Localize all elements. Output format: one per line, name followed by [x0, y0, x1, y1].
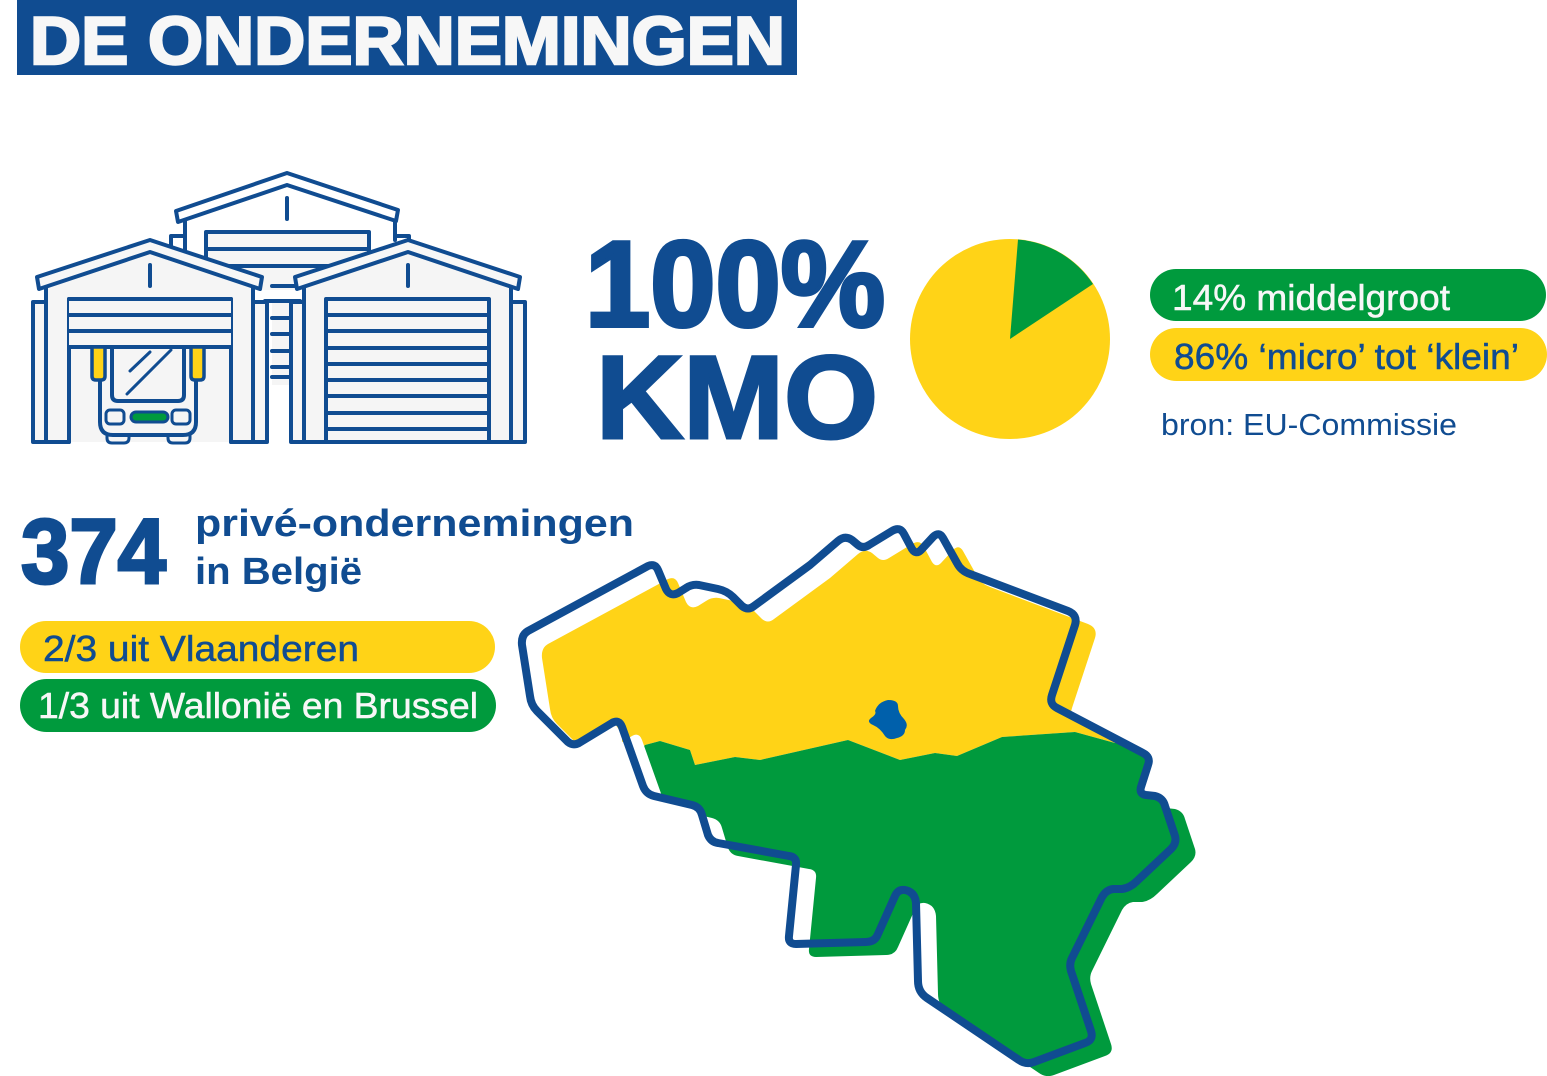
statistic: 374 private companies: in België [195, 551, 362, 593]
icon: garages with bus [33, 173, 525, 443]
statistic: 374 private companies: privé-ondernemingen [195, 503, 634, 545]
legend: KMO size: 14% middelgroot [1172, 277, 1450, 318]
region: Wallonia [644, 732, 1196, 1076]
big number: 100% KMO: KMO [596, 332, 878, 464]
white gaps where the fill stops at the outline [558, 724, 1185, 850]
right garage [291, 240, 525, 442]
legend: regions: 1/3 uit Wallonië en Brussel [38, 685, 478, 726]
region: Flanders [542, 542, 1116, 765]
big number: 100% KMO: 100% [585, 216, 885, 352]
legend: regions: 2/3 uit Vlaanderen [43, 628, 359, 669]
outline [522, 529, 1176, 1063]
left garage [33, 240, 267, 442]
source note: bron: EU-Commissie [1161, 407, 1457, 442]
bus [92, 347, 204, 443]
region: Brussels [869, 700, 907, 739]
statistic: 374 private companies [21, 501, 634, 603]
title: DE ONDERNEMINGEN [30, 3, 785, 79]
pie chart [910, 239, 1110, 439]
legend: KMO size: 86% ‘micro’ tot ‘klein’ [1174, 336, 1519, 377]
back garage [171, 173, 409, 385]
statistic: 374 private companies: 374 [21, 501, 166, 603]
big number: 100% KMO [585, 216, 885, 464]
legend: regions [20, 621, 496, 732]
map of Belgium [522, 529, 1196, 1076]
legend: KMO size [1150, 269, 1547, 381]
